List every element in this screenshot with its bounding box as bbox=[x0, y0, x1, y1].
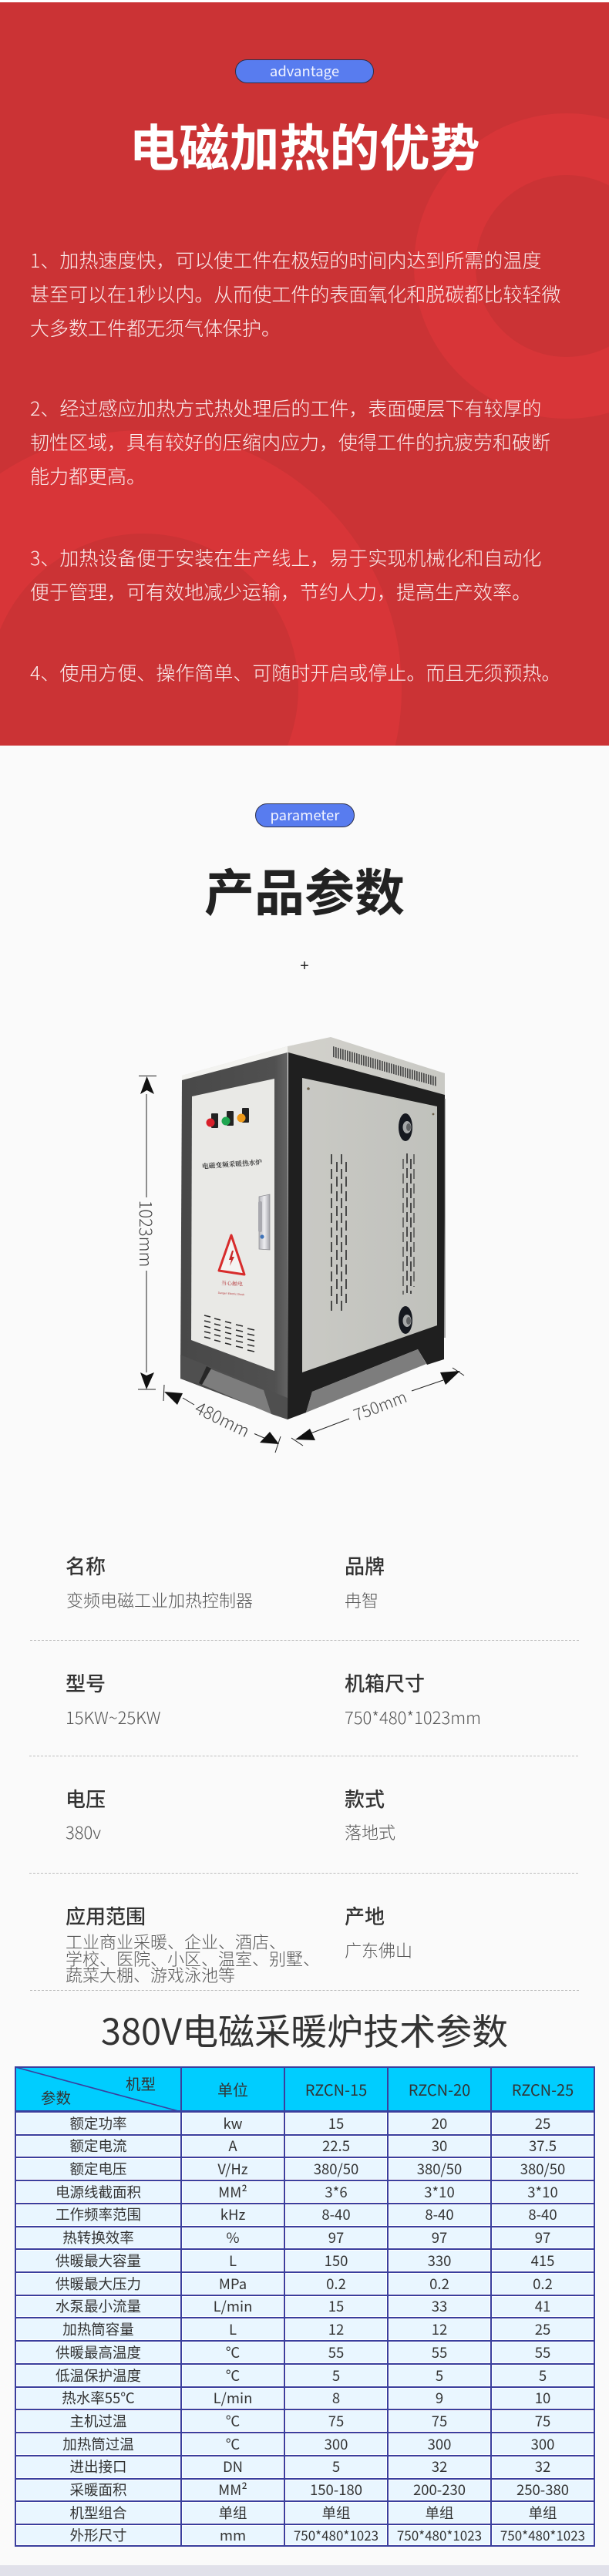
table: technical parameters: 415 bbox=[531, 2251, 554, 2271]
table: technical parameters: RZCN-25 bbox=[512, 2077, 574, 2100]
table header diagonal with labels bbox=[16, 2068, 177, 2110]
depth dimension arrow: 480mm bbox=[191, 1395, 254, 1443]
text: advantage 1 bbox=[30, 246, 560, 342]
text: advantage 1: 1、加热速度快，可以使工件在极短的时间内达到所需的温度 bbox=[30, 246, 541, 274]
width dimension arrow: 750mm bbox=[350, 1385, 410, 1426]
table: technical parameters: 150-180 bbox=[310, 2480, 362, 2500]
table: technical parameters: 97 bbox=[328, 2227, 344, 2248]
table: technical parameters: 380/50 bbox=[417, 2159, 462, 2179]
table: technical parameters: 额定电流 bbox=[69, 2136, 126, 2156]
spec heading: model: 型号 bbox=[66, 1669, 106, 1697]
spec value: voltage: 380v bbox=[66, 1820, 101, 1844]
table: technical parameters: 5 bbox=[539, 2366, 547, 2386]
table: technical parameters: 380/50 bbox=[520, 2159, 565, 2179]
spec value: application bbox=[66, 1929, 320, 1987]
text: advantage 4: 4、使用方便、操作简单、可随时开启或停止。而且无须预热。 bbox=[30, 658, 560, 686]
decorative rings bbox=[0, 113, 609, 746]
table: technical parameters: 5 bbox=[436, 2366, 443, 2386]
text: advantage 2: 韧性区域，具有较好的压缩内应力，使得工件的抗疲劳和破断 bbox=[30, 428, 550, 456]
table: technical parameters: 300 bbox=[428, 2434, 451, 2454]
table: technical parameters: 20 bbox=[432, 2113, 447, 2133]
table: technical parameters: ℃ bbox=[226, 2366, 240, 2386]
table: technical parameters: 300 bbox=[531, 2434, 554, 2454]
table: technical parameters: ℃ bbox=[226, 2434, 240, 2454]
table: technical parameters: 37.5 bbox=[529, 2136, 557, 2156]
table: technical parameters: 加热筒过温 bbox=[62, 2434, 134, 2454]
table: technical parameters: MPa bbox=[219, 2274, 247, 2294]
table: technical parameters: 8-40 bbox=[425, 2204, 454, 2224]
table: technical parameters: 供暖最高温度 bbox=[56, 2342, 141, 2362]
table: technical parameters: 供暖最大容量 bbox=[56, 2251, 141, 2271]
spec heading: brand: 品牌 bbox=[345, 1551, 385, 1580]
table: technical parameters: 8-40 bbox=[321, 2204, 351, 2224]
table: technical parameters: 单组 bbox=[425, 2503, 453, 2523]
table: technical parameters: 25 bbox=[535, 2319, 550, 2339]
text: advantage 2: 能力都更高。 bbox=[30, 462, 146, 490]
table: technical parameters: ℃ bbox=[226, 2411, 240, 2431]
table: technical parameters: DN bbox=[223, 2456, 243, 2477]
heading: advantages: 电磁加热的优势 bbox=[129, 108, 479, 180]
table: technical parameters: L bbox=[229, 2251, 237, 2271]
table: technical parameters: 55 bbox=[535, 2342, 550, 2362]
table: technical parameters: 97 bbox=[535, 2227, 550, 2248]
spec heading: origin: 产地 bbox=[345, 1901, 385, 1930]
table: technical parameters: 32 bbox=[535, 2456, 550, 2477]
table: technical parameters: 55 bbox=[328, 2342, 344, 2362]
table: technical parameters: 300 bbox=[325, 2434, 348, 2454]
table: technical parameters: 水泵最小流量 bbox=[56, 2296, 141, 2316]
table: technical parameters: V/Hz bbox=[217, 2159, 248, 2179]
table: technical parameters: mm bbox=[220, 2525, 246, 2545]
table: technical parameters: kw bbox=[223, 2113, 243, 2133]
text: advantage 1: 大多数工件都无须气体保护。 bbox=[30, 314, 281, 342]
table: technical parameters: A bbox=[228, 2136, 237, 2156]
spec heading: application: 应用范围 bbox=[66, 1901, 146, 1930]
table: technical parameters: % bbox=[226, 2227, 240, 2248]
table: technical parameters: 8 bbox=[332, 2388, 340, 2408]
table: technical parameters: 额定功率 bbox=[69, 2113, 126, 2133]
heading: product parameters: 产品参数 bbox=[204, 853, 405, 925]
door handle bbox=[258, 1194, 270, 1250]
table: technical parameters bbox=[15, 2066, 595, 2547]
table: technical parameters: 97 bbox=[432, 2227, 447, 2248]
table: technical parameters: 0.2 bbox=[326, 2274, 346, 2294]
width dimension arrow bbox=[291, 1368, 464, 1446]
pipe ports bbox=[307, 1087, 434, 1334]
spec heading: style: 款式 bbox=[345, 1784, 385, 1813]
table: technical parameters: 0.2 bbox=[533, 2274, 553, 2294]
table: technical parameters: 200-230 bbox=[413, 2480, 466, 2500]
cabinet left face bbox=[180, 1052, 288, 1419]
text: advantage 3: 3、加热设备便于安装在生产线上，易于实现机械化和自动化 bbox=[30, 544, 541, 571]
table: technical parameters: 150 bbox=[325, 2251, 348, 2271]
table: technical parameters: 机型组合 bbox=[69, 2503, 126, 2523]
spec value: application: 蔬菜大棚、游戏泳池等 bbox=[66, 1962, 235, 1987]
text: advantage 3 bbox=[30, 544, 541, 605]
table: technical parameters: 250-380 bbox=[516, 2480, 569, 2500]
tag: parameter bbox=[255, 803, 355, 827]
table: technical parameters: 75 bbox=[328, 2411, 344, 2431]
table: technical parameters: 32 bbox=[432, 2456, 447, 2477]
control buttons bbox=[207, 1108, 249, 1128]
table: technical parameters: L/min bbox=[214, 2296, 252, 2316]
table: technical parameters: 热水率55℃ bbox=[62, 2388, 135, 2408]
table: technical parameters: 750*480*1023 bbox=[500, 2525, 585, 2544]
table: technical parameters: 12 bbox=[432, 2319, 447, 2339]
spec value: cabinet size: 750*480*1023mm bbox=[345, 1705, 481, 1729]
tag: advantage bbox=[235, 59, 374, 83]
spec value: application: 学校、医院、小区、温室、别墅、 bbox=[66, 1946, 320, 1971]
table: technical parameters: 单组 bbox=[321, 2503, 350, 2523]
table: technical parameters: 3*10 bbox=[424, 2182, 455, 2202]
table: technical parameters: 额定电压 bbox=[69, 2159, 126, 2179]
text: advantage 3: 便于管理，可有效地减少运输，节约人力，提高生产效率。 bbox=[30, 577, 531, 605]
table: technical parameters: 0.2 bbox=[429, 2274, 449, 2294]
spec heading: name: 名称 bbox=[66, 1551, 106, 1580]
table: technical parameters: 热转换效率 bbox=[62, 2227, 134, 2248]
table header diagonal with labels: 机型 bbox=[126, 2072, 156, 2094]
table: technical parameters: 33 bbox=[432, 2296, 447, 2316]
right panel vents bbox=[331, 1153, 414, 1313]
cabinet right face bbox=[288, 1052, 445, 1419]
plus mark: + bbox=[300, 958, 309, 975]
panel: advantages bbox=[0, 2, 609, 746]
table: technical parameters: 工作频率范围 bbox=[56, 2204, 141, 2224]
table: technical parameters: RZCN-20 bbox=[409, 2077, 470, 2100]
table: technical parameters: 5 bbox=[332, 2366, 340, 2386]
table: technical parameters: 12 bbox=[328, 2319, 344, 2339]
spec value: origin: 广东佛山 bbox=[345, 1938, 412, 1962]
table: technical parameters: 750*480*1023 bbox=[294, 2525, 379, 2544]
heading: technical parameters: 380V电磁采暖炉技术参数 bbox=[101, 2002, 508, 2056]
spec value: style: 落地式 bbox=[345, 1820, 395, 1844]
table: technical parameters: L bbox=[229, 2319, 237, 2339]
table: technical parameters: 15 bbox=[328, 2113, 344, 2133]
table: technical parameters: 41 bbox=[535, 2296, 550, 2316]
table: technical parameters: 8-40 bbox=[528, 2204, 557, 2224]
panel label text: 电磁变频采暖热水炉 bbox=[202, 1157, 263, 1171]
table: technical parameters: kHz bbox=[220, 2204, 245, 2224]
table: technical parameters: 25 bbox=[535, 2113, 550, 2133]
product diagram: cabinet with dimensions bbox=[134, 1037, 464, 1453]
table: technical parameters: 采暖面积 bbox=[69, 2480, 126, 2500]
cabinet top bbox=[182, 1037, 445, 1096]
table: technical parameters: 55 bbox=[432, 2342, 447, 2362]
table: technical parameters: 75 bbox=[535, 2411, 550, 2431]
table: technical parameters: 低温保护温度 bbox=[56, 2366, 141, 2386]
spec value: application: 工业商业采暖、企业、酒店、 bbox=[66, 1929, 286, 1954]
table: technical parameters: 3*6 bbox=[325, 2182, 348, 2202]
table: technical parameters: 单位 bbox=[217, 2077, 248, 2100]
table: technical parameters: 380/50 bbox=[314, 2159, 358, 2179]
table: technical parameters: 9 bbox=[436, 2388, 443, 2408]
table: technical parameters: 5 bbox=[332, 2456, 340, 2477]
spec value: brand: 冉智 bbox=[345, 1588, 379, 1612]
spec value: model: 15KW~25KW bbox=[66, 1705, 160, 1729]
tag: parameter: parameter bbox=[270, 805, 339, 825]
table: technical parameters: 单组 bbox=[528, 2503, 557, 2523]
depth dimension arrow bbox=[163, 1385, 281, 1453]
table: technical parameters: L/min bbox=[214, 2388, 252, 2408]
bottom strip bbox=[0, 2565, 609, 2576]
warning sign bbox=[218, 1235, 245, 1296]
height dimension arrow: 1023mm bbox=[134, 1200, 159, 1267]
table: technical parameters: 主机过温 bbox=[69, 2411, 126, 2431]
table: technical parameters: 3*10 bbox=[527, 2182, 558, 2202]
text: advantage 1: 甚至可以在1秒以内。从而使工件的表面氧化和脱碳都比较轻微 bbox=[30, 280, 560, 308]
table: technical parameters: MM² bbox=[218, 2480, 247, 2500]
left panel vents bbox=[204, 1315, 254, 1352]
table: technical parameters: 330 bbox=[428, 2251, 451, 2271]
table header diagonal with labels: 参数 bbox=[41, 2086, 71, 2108]
table: technical parameters: 单组 bbox=[218, 2503, 247, 2523]
top white strip bbox=[0, 0, 609, 2]
spec heading: cabinet size: 机箱尺寸 bbox=[345, 1669, 425, 1697]
table: technical parameters: 10 bbox=[535, 2388, 550, 2408]
table: technical parameters: 15 bbox=[328, 2296, 344, 2316]
height dimension arrow bbox=[134, 1076, 159, 1389]
table: technical parameters: 加热筒容量 bbox=[62, 2319, 134, 2339]
text: advantage 2: 2、经过感应加热方式热处理后的工件，表面硬层下有较厚的 bbox=[30, 394, 541, 422]
warning sign: Danger! Electric Shock bbox=[218, 1291, 245, 1296]
table: technical parameters: 进出接口 bbox=[69, 2456, 126, 2477]
tag: advantage: advantage bbox=[270, 61, 339, 81]
text: advantage 2 bbox=[30, 394, 550, 490]
table: technical parameters: MM² bbox=[218, 2182, 247, 2202]
table: technical parameters: 30 bbox=[432, 2136, 447, 2156]
spec heading: voltage: 电压 bbox=[66, 1784, 106, 1813]
table: technical parameters: 75 bbox=[432, 2411, 447, 2431]
table: technical parameters: ℃ bbox=[226, 2342, 240, 2362]
table: technical parameters: 供暖最大压力 bbox=[56, 2274, 141, 2294]
table: technical parameters: 750*480*1023 bbox=[397, 2525, 482, 2544]
spec value: name: 变频电磁工业加热控制器 bbox=[66, 1588, 253, 1612]
warning sign: 当心触电 bbox=[221, 1279, 243, 1288]
table: technical parameters: 22.5 bbox=[322, 2136, 350, 2156]
table: technical parameters: 外形尺寸 bbox=[69, 2525, 126, 2545]
table: technical parameters: 电源线截面积 bbox=[56, 2182, 141, 2202]
table: technical parameters: RZCN-15 bbox=[305, 2077, 367, 2100]
